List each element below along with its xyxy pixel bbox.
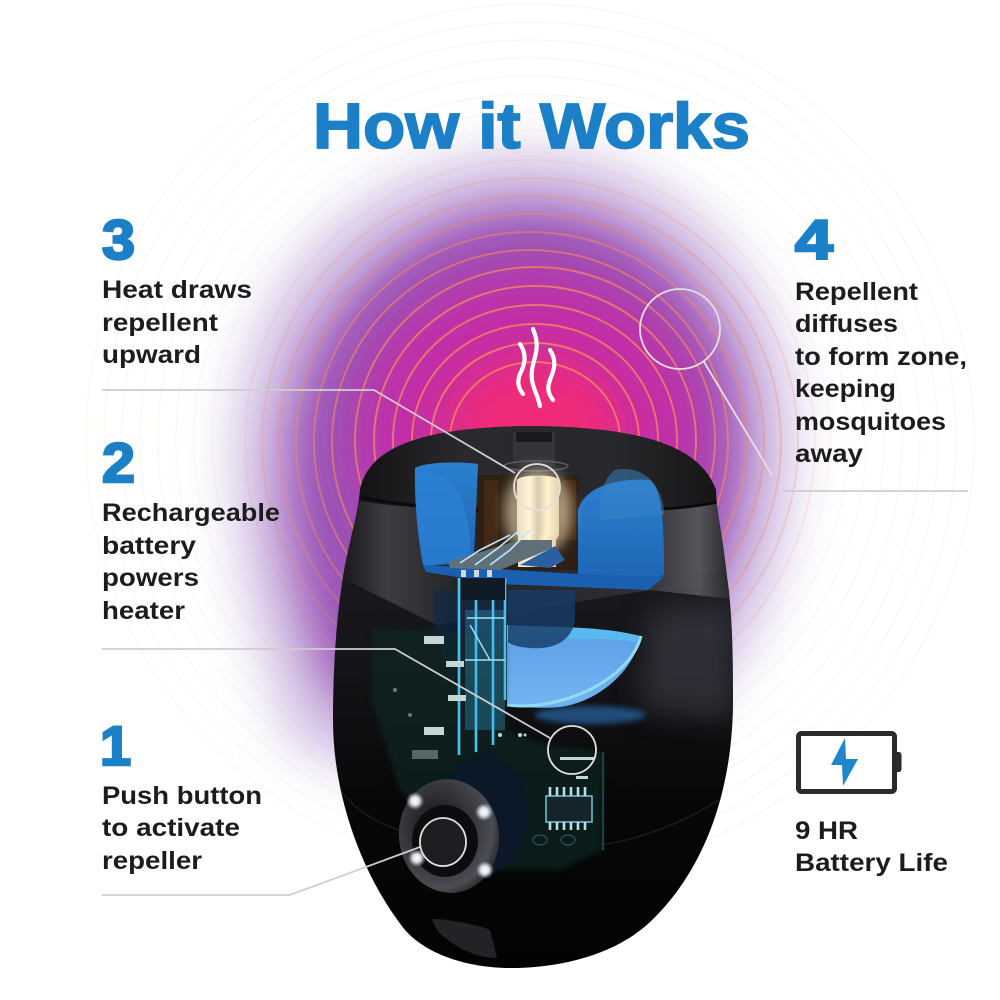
step 3 text: Heat draws xyxy=(102,276,252,304)
step 4 text: mosquitoes xyxy=(795,408,946,436)
icon: rising heat waves xyxy=(518,329,554,406)
faint outer contour rings xyxy=(86,4,974,876)
step 4 text: diffuses xyxy=(795,310,898,338)
callout 3 line and circle xyxy=(102,390,560,510)
battery life text: 9 HR xyxy=(795,817,858,845)
left blue tank xyxy=(415,463,478,566)
step 2 text: heater xyxy=(102,597,185,625)
step 2 text: 2 xyxy=(102,431,135,494)
step 1 text: repeller xyxy=(102,847,202,875)
reservoir bowl xyxy=(433,590,645,724)
button gear xyxy=(440,752,530,880)
lid xyxy=(355,426,725,512)
step 4 text: keeping xyxy=(795,375,896,403)
callout 4 line and circle xyxy=(640,289,968,491)
step 4 text: away xyxy=(795,440,863,468)
device: repeller cutaway xyxy=(330,426,740,968)
lower right sheen xyxy=(640,600,735,720)
right blue tank xyxy=(578,480,664,583)
step 3 text xyxy=(102,208,252,369)
battery life text: Battery Life xyxy=(795,849,948,877)
step 4 text: Repellent xyxy=(795,278,919,306)
circuit bridge xyxy=(448,530,565,577)
step 1 text xyxy=(100,714,262,875)
purple and pink glow xyxy=(231,150,796,790)
circuit board xyxy=(372,578,603,870)
step 1 text: to activate xyxy=(102,814,240,842)
step 3 text: 3 xyxy=(102,208,135,271)
base notch xyxy=(432,919,497,958)
step 3 text: repellent xyxy=(102,309,219,337)
upper body band xyxy=(330,495,740,625)
step 4 text: 4 xyxy=(795,208,833,271)
step 2 text: Rechargeable xyxy=(102,499,280,527)
amber core chamber xyxy=(478,475,580,570)
step 4 text xyxy=(795,208,967,468)
step 1 text: 1 xyxy=(100,714,131,777)
step 2 text: battery xyxy=(102,532,196,560)
top nozzle xyxy=(504,432,568,471)
battery life text xyxy=(795,817,948,877)
blue tray xyxy=(423,565,664,590)
step 2 text xyxy=(102,431,280,625)
orange contour rings xyxy=(244,159,816,648)
heater element xyxy=(504,468,572,567)
control chip xyxy=(530,752,603,850)
callout 2 line and circle xyxy=(102,649,596,774)
device body silhouette xyxy=(333,426,733,968)
step 2 text: powers xyxy=(102,564,199,592)
step 1 text: Push button xyxy=(102,782,262,810)
title: How it Works xyxy=(313,90,750,162)
step 4 text: to form zone, xyxy=(795,343,967,371)
push button with LED ring xyxy=(392,773,506,899)
callout 1 line and circle xyxy=(102,818,466,895)
step 3 text: upward xyxy=(102,341,201,369)
icon: battery xyxy=(798,734,902,792)
